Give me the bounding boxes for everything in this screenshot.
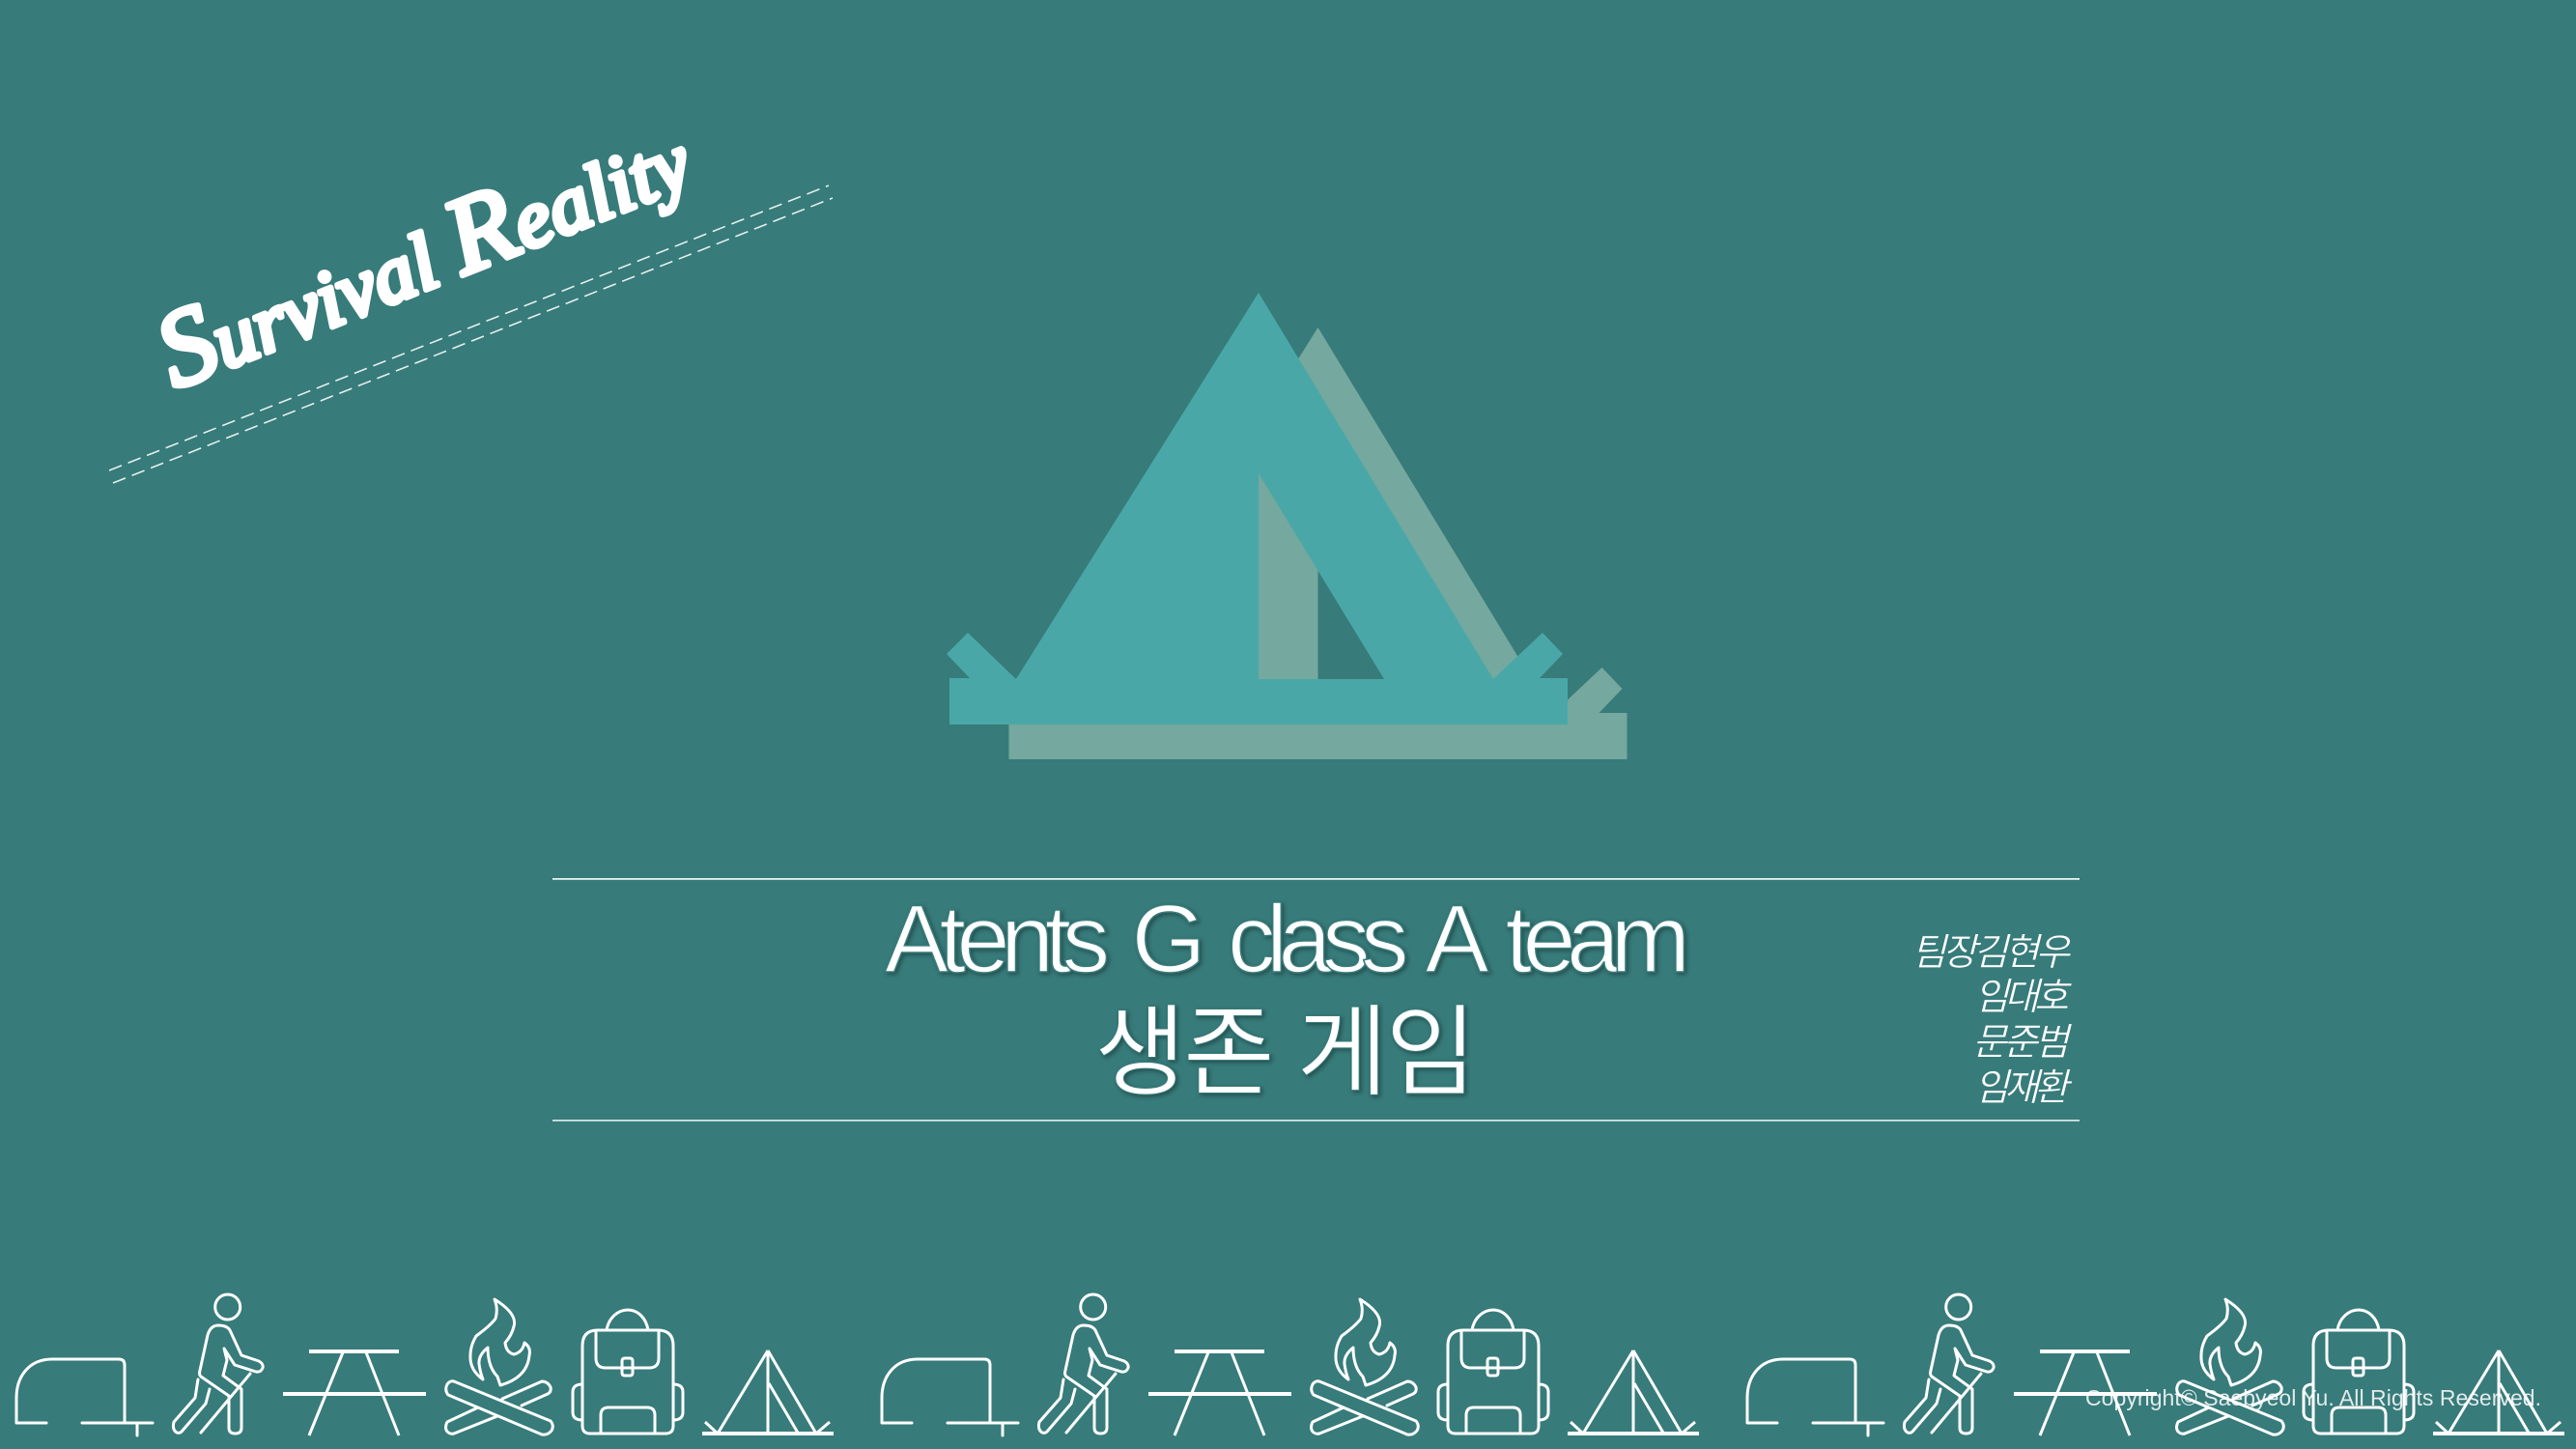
copyright notice: Copyright© Saebyeol Yu. All Rights Reserved. xyxy=(2085,1385,2541,1410)
icon: backpack xyxy=(2304,1310,2414,1434)
icon: small tent xyxy=(2436,1350,2561,1434)
icon: hiker xyxy=(1904,1294,1994,1434)
icon: table legs xyxy=(309,1352,399,1435)
icon: campfire flame xyxy=(1336,1299,1395,1385)
icon: camper trailer xyxy=(1747,1359,1883,1435)
team member names: 팀장김현우 xyxy=(1911,932,2072,974)
big tent shadow xyxy=(1006,327,1627,759)
icon: small tent xyxy=(705,1350,830,1434)
icon: small tent xyxy=(1571,1350,1695,1434)
icon: campfire flame xyxy=(470,1299,529,1385)
dashed underline pair xyxy=(109,185,833,483)
icon row 1 xyxy=(16,1294,834,1435)
team member names: 문준범 xyxy=(1972,1022,2073,1064)
logo: Survival Reality script: Survival Reality xyxy=(140,94,705,412)
team member names: 임재환 xyxy=(1974,1067,2073,1109)
big tent xyxy=(947,293,1568,724)
title: English: Atents G class A team xyxy=(885,885,1690,992)
team member names xyxy=(1911,932,2073,1109)
title rule top xyxy=(552,878,2080,880)
icon: campfire logs xyxy=(2177,1381,2283,1435)
icon: campfire logs xyxy=(1312,1381,1418,1435)
icon: table legs xyxy=(1175,1352,1264,1435)
icon: backpack xyxy=(1438,1310,1548,1434)
icon: camper trailer xyxy=(16,1359,153,1435)
icon: hiker xyxy=(173,1294,263,1434)
icon: tent ground xyxy=(1568,1432,1699,1435)
team member names: 임대호 xyxy=(1974,977,2072,1018)
icon row 3 xyxy=(1747,1294,2564,1435)
icon: picnic table xyxy=(2014,1351,2157,1394)
icon row 2 xyxy=(882,1294,1699,1435)
icon: camper trailer xyxy=(882,1359,1018,1435)
icon: tent ground xyxy=(702,1432,834,1435)
icon: table legs xyxy=(2040,1352,2130,1435)
icon: backpack xyxy=(573,1310,683,1434)
icon: campfire flame xyxy=(2201,1299,2260,1385)
icon: picnic table xyxy=(1148,1351,1291,1394)
icon: hiker xyxy=(1038,1294,1128,1434)
icon: tent ground xyxy=(2433,1432,2564,1435)
title: Korean: 생존 게임 xyxy=(1094,997,1477,1108)
title rule bottom xyxy=(552,1120,2080,1122)
icon: picnic table xyxy=(283,1351,426,1394)
icon: campfire logs xyxy=(446,1381,552,1435)
